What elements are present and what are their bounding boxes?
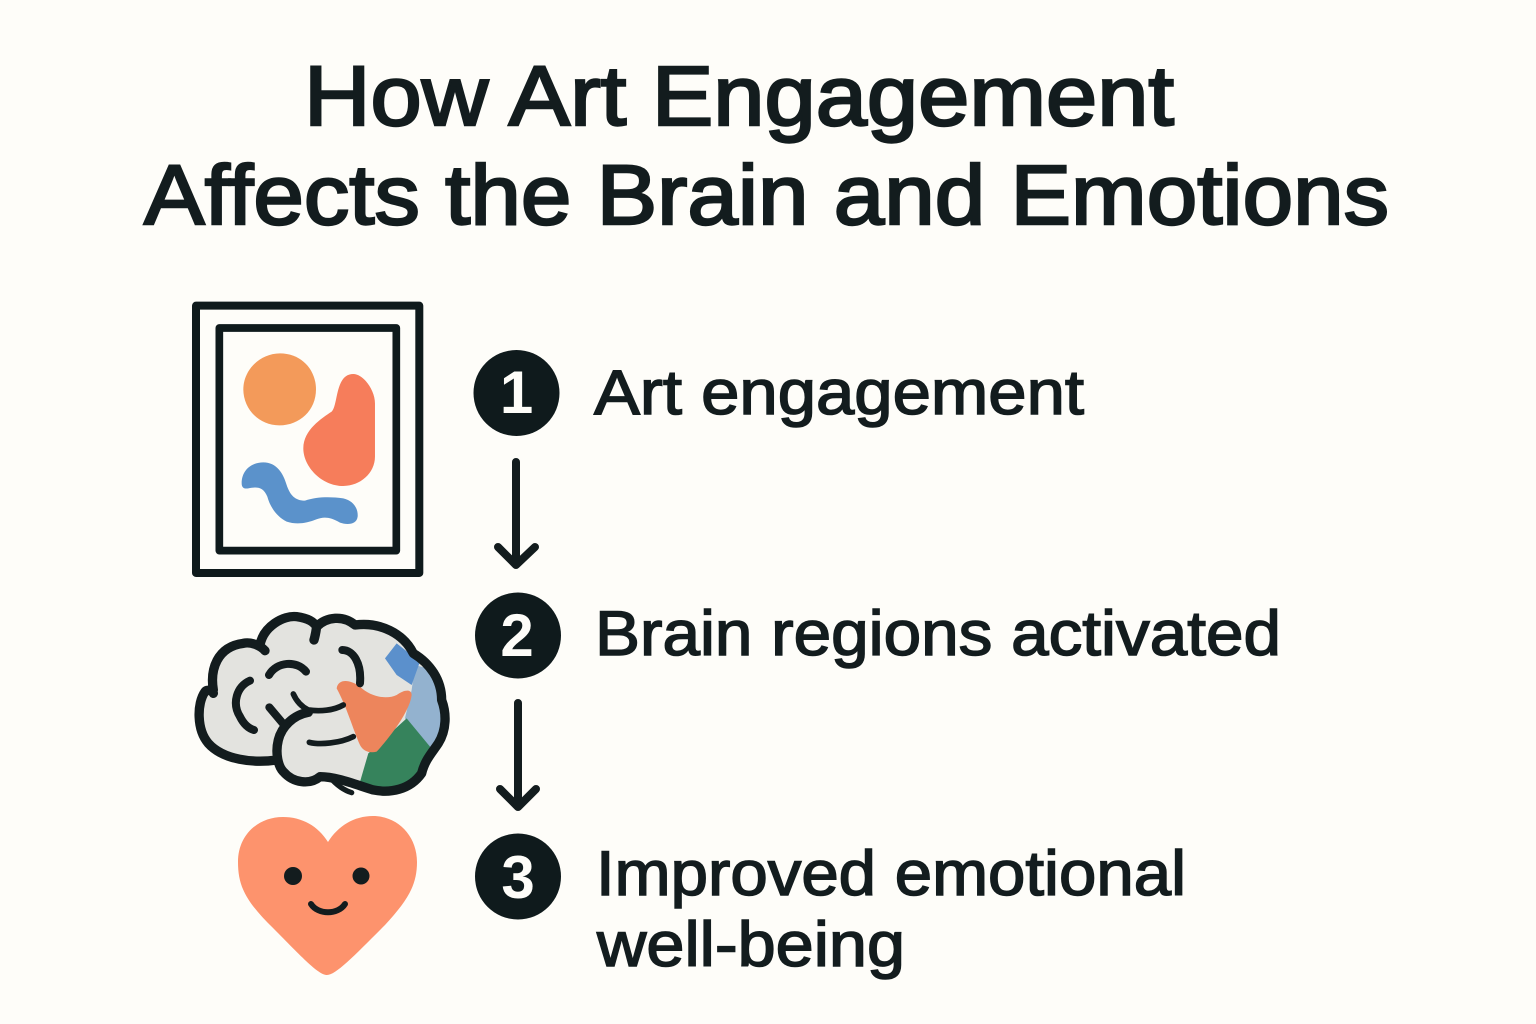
title bbox=[144, 49, 1389, 242]
icon: brain with highlighted regions bbox=[199, 617, 447, 797]
step 2 number badge: 2 bbox=[500, 602, 534, 669]
step 3 number badge bbox=[475, 834, 561, 920]
step 3 number badge: 3 bbox=[501, 844, 535, 911]
step 2 label: Brain regions activated bbox=[595, 599, 1281, 669]
arrow: step 2 to step 3 bbox=[500, 703, 536, 807]
step 3 label: Improved emotional bbox=[596, 839, 1186, 909]
icon: framed artwork bbox=[196, 306, 419, 573]
title: How Art Engagement bbox=[304, 49, 1174, 143]
step 3 label bbox=[596, 839, 1186, 980]
title: Affects the Brain and Emotions bbox=[144, 148, 1389, 242]
step 3 label: well-being bbox=[596, 910, 905, 980]
arrow: step 1 to step 2 bbox=[498, 462, 535, 565]
step 2 number badge bbox=[475, 592, 561, 678]
icon: smiling heart bbox=[238, 816, 417, 975]
step 1 number badge: 1 bbox=[500, 359, 533, 426]
step 1 number badge bbox=[474, 350, 560, 436]
infographic canvas bbox=[142, 66, 1388, 980]
step 1 label: Art engagement bbox=[594, 358, 1085, 428]
